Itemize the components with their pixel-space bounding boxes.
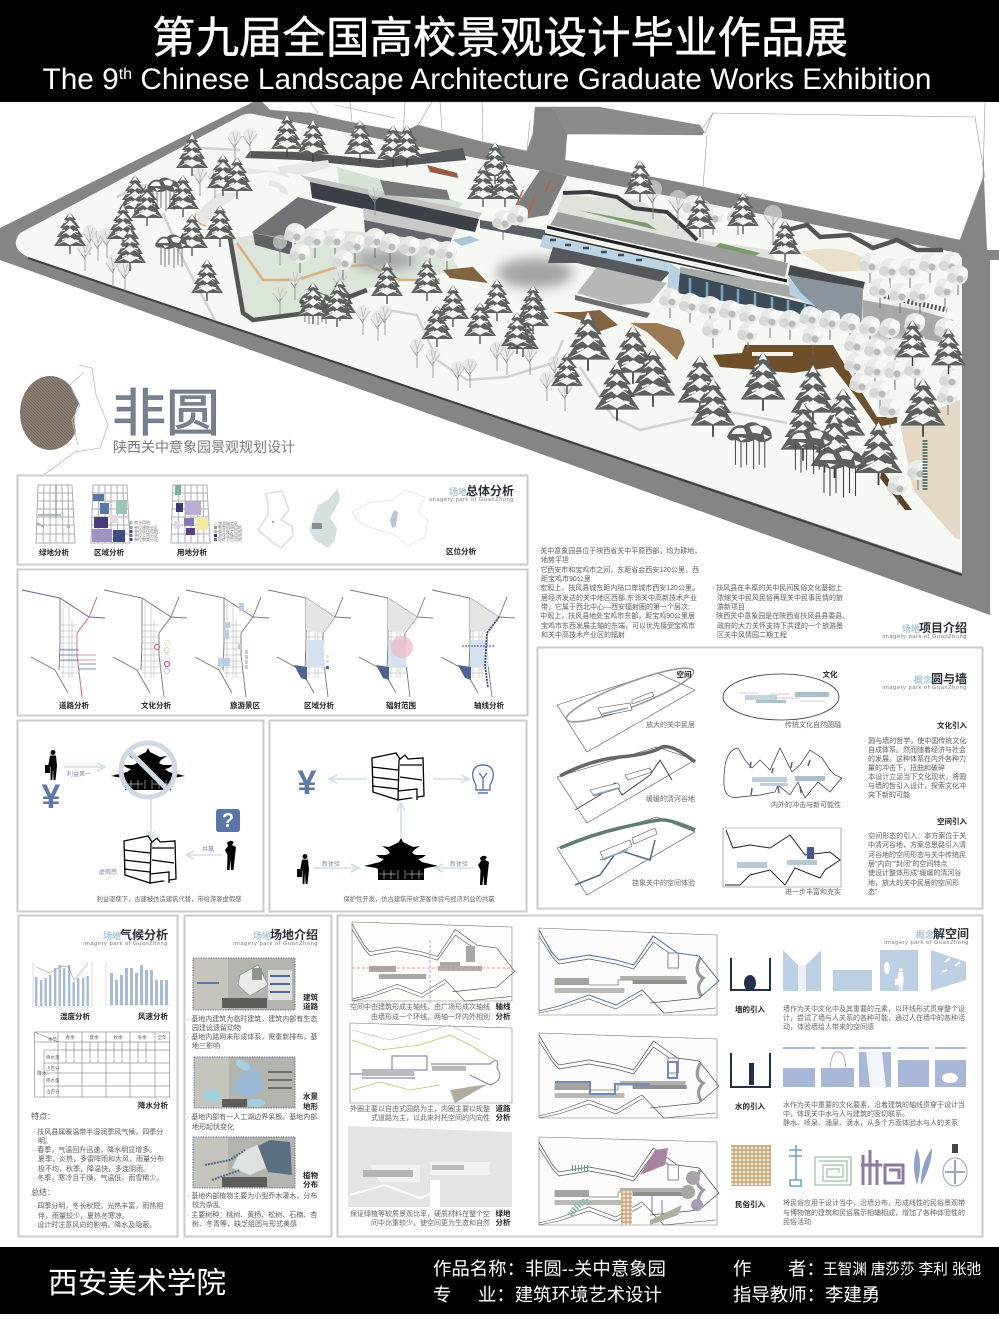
rainfall table: 占百分 xyxy=(46,1065,60,1072)
icon: temple xyxy=(364,838,438,880)
photo labels: 水景 xyxy=(303,1091,318,1101)
purple glyph xyxy=(861,1150,903,1185)
bar chart: humidity xyxy=(33,962,92,1007)
rainfall table: 全年 xyxy=(158,1034,167,1041)
wall panel figures xyxy=(798,958,960,991)
author info: 王智渊 唐莎莎 李利 张弛 xyxy=(823,1260,982,1278)
erhu xyxy=(789,1145,802,1186)
panel: site introduction xyxy=(184,916,332,1236)
panel labels: 区位分析 xyxy=(446,546,476,556)
panel labels: 区域分析 xyxy=(304,700,334,710)
icon: tourist xyxy=(478,856,489,885)
silhouette xyxy=(744,975,756,991)
arrow: new experience right xyxy=(435,860,474,872)
timber terraces xyxy=(443,267,912,510)
location: Shaanxi province xyxy=(309,488,340,548)
text: culture introduction: 突下新的可能 xyxy=(868,790,910,799)
chart labels xyxy=(60,1011,168,1021)
text: water: 地形起伏变化 xyxy=(192,1122,234,1131)
wall experience panels xyxy=(783,950,966,991)
upper garden and wall xyxy=(555,192,943,275)
text: culture introduction: · 本设计立足当下文化现状，将圆 xyxy=(864,772,966,781)
text block: project introduction: 区关中风情园二期工程 xyxy=(717,630,787,639)
captions: left plans: 分析 xyxy=(496,1011,511,1021)
rainfall table: 降水量 xyxy=(46,1077,60,1084)
text: culture introduction xyxy=(864,720,967,799)
panel labels xyxy=(59,700,504,710)
text block: project introduction: 居经济发达的关中地区西部,东邻关中高新技术产业 xyxy=(541,593,697,602)
text: space introduction: 态” xyxy=(868,887,878,896)
icon: question mark xyxy=(216,809,240,832)
maze pattern xyxy=(815,1157,851,1185)
text: space introduction xyxy=(864,816,967,896)
land-use legend: 商业服务用地 xyxy=(218,528,242,534)
water panels xyxy=(783,1047,966,1087)
tourism map xyxy=(186,590,269,697)
diagram: impact xyxy=(724,748,842,798)
location: China map xyxy=(352,490,428,546)
caption: 保护性开发，仿古建筑带给游客体验与经济利益的共赢 xyxy=(343,894,495,903)
icon: modern building xyxy=(124,836,176,883)
courtyards xyxy=(230,167,463,320)
plan: green analysis xyxy=(348,1126,512,1207)
text: features: 特点： xyxy=(31,1111,55,1121)
rainfall table: 季节 xyxy=(48,1036,57,1043)
arrow: down xyxy=(147,799,155,839)
heading xyxy=(884,926,969,946)
snow ground xyxy=(16,114,962,573)
aerial: water and terrain xyxy=(194,1057,295,1108)
text: features: · 扶风县属暖温带半湿润季风气候，四季分 xyxy=(33,1127,163,1136)
section diagram xyxy=(731,958,770,990)
text: water: · 基地内部有一人工湖边界呆板。基地内部 xyxy=(187,1112,317,1121)
text: culture introduction: 与墙的哲引入设计，探索文化冲 xyxy=(868,781,966,790)
text: summary: 总结： xyxy=(31,1187,55,1197)
text: 与博物馆的建筑和民俗展示相辅相成，增加了各种体验性的 xyxy=(783,1208,965,1217)
text: buildings: 园建设遗留动物 xyxy=(192,1023,241,1032)
arrow: win-win xyxy=(186,845,222,859)
leaves xyxy=(914,1148,932,1185)
panel labels: 道路分析 xyxy=(59,700,89,710)
label: 民俗引入 xyxy=(735,1199,765,1209)
panel: overall analysis xyxy=(18,476,528,564)
text: features xyxy=(31,1111,164,1182)
diagram: culture circle xyxy=(723,674,839,720)
text: culture introduction: 的发展。这种体系在内外各种力 xyxy=(868,754,966,763)
work info: 业：建筑环境艺术设计 xyxy=(478,1284,662,1305)
heading xyxy=(882,671,967,691)
title: English: Chinese Landscape Architecture Graduate Works Exhibition xyxy=(132,63,932,96)
diagram labels: 挂象关中的空间体验 xyxy=(632,878,695,887)
text: plants: · 主要树种：桃树、黄杨、松树、石楠、杏 xyxy=(187,1210,317,1219)
text: 民俗活动 xyxy=(783,1217,811,1226)
land-use legend: 医疗卫生用地 xyxy=(218,536,242,542)
diagram labels: 传统文化自然圆融 xyxy=(785,720,841,729)
heading: project introduction xyxy=(882,620,967,640)
text: summary: · 设计时注意风向的影响，降水及隐蔽。 xyxy=(33,1220,156,1229)
site paths xyxy=(117,148,787,430)
label: 水的引入 xyxy=(735,1101,765,1111)
table caption: 降水分析 xyxy=(138,1100,168,1110)
icon: traveler xyxy=(45,750,57,780)
heading: 场地介绍 xyxy=(270,927,318,942)
icon: building xyxy=(372,753,424,800)
text: summary: 伴，雨量较少，夏热冬寒凉。 xyxy=(38,1211,129,1220)
arrow: win-win: 共赢 xyxy=(202,845,214,853)
rainfall table: 秋季 xyxy=(114,1034,123,1041)
zoning legend xyxy=(130,519,158,542)
photo labels: 植物 xyxy=(303,1170,318,1180)
photo labels: 分布 xyxy=(303,1179,318,1189)
chart labels: 风速分析 xyxy=(138,1011,168,1021)
captions: left plans: 分析 xyxy=(496,1112,511,1122)
diagram: enlarged courtyard xyxy=(557,659,698,752)
vase xyxy=(943,1144,967,1186)
logo title: 非圆 xyxy=(112,385,220,442)
title: Chinese: 第九届全国高校景观设计毕业作品展 xyxy=(152,15,848,63)
photo labels: 道路 xyxy=(303,1001,318,1011)
icon: tourist xyxy=(225,841,236,870)
logo: 非圆 xyxy=(20,365,295,474)
heading: 概念 xyxy=(916,929,934,940)
text: 墙作为关中文化中及其重要的元素，以环线形式贯穿整个设 xyxy=(783,1004,965,1013)
heading xyxy=(233,927,318,947)
heading: project introduction: 场地 xyxy=(902,623,920,634)
chart labels: 湿度分析 xyxy=(60,1011,90,1021)
zoning legend: 单位教育分区 xyxy=(134,536,158,542)
radiation map xyxy=(350,590,433,697)
label: 墙的引入 xyxy=(735,1004,765,1014)
road map xyxy=(22,590,105,697)
aerial masterplan xyxy=(0,102,999,615)
culture legend xyxy=(164,640,170,674)
captions: left plans: 分析 xyxy=(496,1217,511,1227)
aerial: buildings and roads xyxy=(193,958,295,1010)
tourism legend xyxy=(245,650,248,669)
face cut xyxy=(72,368,106,447)
captions: left plans: 外圈主要以自由式园路为主，内圈主要以规整 xyxy=(350,1104,490,1113)
section diagram xyxy=(731,1053,770,1087)
captions: left plans: 间中比重较少，使空间更为生态和自然 xyxy=(371,1218,490,1227)
photo labels xyxy=(303,992,318,1189)
diagram labels: 文化 xyxy=(822,669,838,679)
paper-cut pattern xyxy=(731,1145,771,1186)
arrow: to yen xyxy=(329,775,367,783)
captions: left plans: 轴线 xyxy=(496,1001,511,1011)
culture map xyxy=(104,590,187,697)
caption: 利益驱使下，古建被仿造建筑代替，带给游客虚假感 xyxy=(97,894,242,903)
text: plants xyxy=(187,1191,317,1228)
snowy pine trees: large xyxy=(566,312,966,498)
captions: left plans: 式道路为主，以此来衬托空间的内向性 xyxy=(371,1113,490,1122)
text: water xyxy=(187,1112,317,1131)
panel labels: 文化分析 xyxy=(141,700,171,710)
text: plants: 树、冬青等，缺乏组团与形式美感 xyxy=(192,1219,297,1228)
text block: project introduction: 距宝鸡市90公里 xyxy=(541,574,591,583)
rainfall table: 春季 xyxy=(66,1034,75,1041)
author info: 作 xyxy=(733,1258,751,1279)
arrow: new experience right: 新体验 xyxy=(450,860,468,868)
land-use legend: 教育科研用地 xyxy=(218,524,242,530)
text: plants: · 基地内部植物主要为小型乔木灌木，分布 xyxy=(187,1191,317,1200)
text: summary xyxy=(31,1187,163,1229)
text: space introduction: 居“内向”“封闭”的空间特点 xyxy=(868,859,947,868)
icon: question mark: ? xyxy=(222,810,234,832)
work info: 专 xyxy=(433,1284,451,1305)
water details xyxy=(830,1052,958,1087)
text: features: · 春季，气温回升迅速，降水明显增多。 xyxy=(33,1145,156,1154)
captions: left plans: 绿地 xyxy=(496,1208,511,1218)
text: culture introduction: · 圆与墙的哲学，使中国传统文化 xyxy=(864,736,966,745)
text: space introduction: · 空间形态的引入：本方案位于关 xyxy=(864,831,966,840)
land-use legend xyxy=(214,520,242,542)
text block: project introduction: 游新项目 xyxy=(717,602,745,611)
heading xyxy=(429,483,514,503)
header band xyxy=(0,0,999,102)
icon: yen: ¥ xyxy=(42,778,61,816)
text: features: 明。 xyxy=(38,1137,52,1145)
text: summary: · 四季分明，冬长秋短，光热丰富，雨热相 xyxy=(33,1201,163,1210)
rainfall table: 占百分 xyxy=(46,1088,60,1095)
title: English: The 9 xyxy=(42,63,119,96)
text: space introduction: 中清河谷地，方案总思路引入清 xyxy=(868,840,966,849)
zoning legend: 单位居住用地 xyxy=(134,528,158,534)
text xyxy=(783,1100,965,1127)
text: features: 极不均，秋季，降温快，多连阴雨。 xyxy=(38,1164,150,1173)
logo circle xyxy=(20,376,80,450)
heading: 圆与墙 xyxy=(931,671,967,686)
text: 动，体验墙给人带来的空间感 xyxy=(783,1022,874,1031)
logo subtitle: 陕西关中意象园景观规划设计 xyxy=(113,439,295,455)
zoning legend: 单位公园分区 xyxy=(134,532,158,538)
text: 静水、喷泉、涌泉、滴水，从多个方面体验水与人的关系 xyxy=(783,1118,958,1127)
photo labels: 地形 xyxy=(303,1101,318,1111)
text block: project introduction: · 中观上，扶风县地处宝鸡市东部，距宝鸡90公里居 xyxy=(536,611,695,620)
location: county outline xyxy=(258,491,293,548)
face outline xyxy=(45,365,108,474)
rainfall table: 冬季 xyxy=(138,1034,147,1041)
panel: problem diagram xyxy=(18,720,264,912)
diagram: spatial experience xyxy=(557,817,695,895)
row: folk introduction xyxy=(731,1144,967,1226)
panel labels xyxy=(39,546,476,557)
bare trees xyxy=(78,128,782,411)
photo labels: 建筑 xyxy=(303,992,318,1002)
land-use map xyxy=(171,485,210,543)
axis map xyxy=(432,590,515,697)
plan: wall xyxy=(539,928,719,1015)
text block: project introduction: 宝鸡市东西发展主轴的东端，可以优先接受宝鸡市 xyxy=(541,621,695,630)
text block: project introduction: 浓缩关中民风民俗再现关中民事民情的旅 xyxy=(717,593,843,602)
rainfall table xyxy=(34,1032,170,1097)
heading: 解空间 xyxy=(933,926,969,941)
heading: 场地 xyxy=(103,930,121,941)
panel: circle and wall concept xyxy=(538,648,982,908)
zoning legend: 单位建筑分区 xyxy=(134,524,158,530)
work info xyxy=(433,1258,666,1305)
text: 中，体现关中水与人与建筑的密切联系。 xyxy=(783,1109,909,1118)
text: buildings xyxy=(187,1014,317,1050)
footer band xyxy=(0,1247,999,1314)
plan: folk xyxy=(539,1137,719,1225)
diagram labels: 进一步丰富和充实 xyxy=(785,887,841,896)
aerial: vegetation xyxy=(193,1137,295,1188)
heading: imagery park of GuanZhong xyxy=(233,941,318,947)
rainfall table: 夏季 xyxy=(90,1034,99,1041)
heading: 概念 xyxy=(914,674,932,685)
heading: project introduction: 项目介绍 xyxy=(919,620,967,635)
text block: project introduction: · 宏观上，扶风县城东距内陆口岸城市西安120公里。 xyxy=(536,583,699,592)
panel: climate analysis xyxy=(18,916,178,1236)
arrow: to idea xyxy=(433,775,469,783)
text: culture introduction: 文化引入 xyxy=(937,720,967,730)
arrow: new experience left: 新体验 xyxy=(322,860,340,868)
icon: yen: ¥ xyxy=(298,764,317,802)
bar chart: wind speed xyxy=(106,962,170,1005)
text: space introduction: 地，放大的关中民居的空间形 xyxy=(868,878,959,887)
row: water introduction xyxy=(731,1047,966,1127)
author info xyxy=(733,1258,982,1305)
text block: project introduction: 带，它属于西北中心—西安辐射圈的第一个层次; xyxy=(541,602,690,611)
snowy pine trees: small xyxy=(54,115,801,394)
zoning map xyxy=(91,485,130,543)
panel labels: 旅游景区 xyxy=(230,700,260,710)
text block: project introduction xyxy=(536,546,849,639)
plan: axis analysis xyxy=(352,922,515,1005)
text: plants: 较为杂乱 xyxy=(192,1200,220,1209)
panel: road and culture analysis xyxy=(18,570,528,716)
text block: project introduction: 地势平坦 xyxy=(541,555,569,564)
text: features: 夏季，炎热，多雷阵雨和大风，雨量分布 xyxy=(38,1154,164,1163)
heading: imagery park of GuanZhong xyxy=(83,941,168,947)
text: 将民俗应用于设计当中，沿墙分布，形成线性的民俗景观带 xyxy=(783,1198,965,1207)
text block: project introduction: · 扶风县在丰厚的关中民间民俗文化基础上 xyxy=(712,583,842,592)
ground edge shadow xyxy=(28,258,962,575)
silhouette xyxy=(749,1063,754,1085)
work info: 作品名称：非圆--关中意象园 xyxy=(433,1258,666,1279)
land-use legend: 文化设施用地 xyxy=(218,532,242,538)
heading: imagery park of GuanZhong xyxy=(429,497,514,503)
west wing buildings xyxy=(195,148,482,255)
captions: left plans xyxy=(350,1001,511,1227)
title: English: th xyxy=(119,66,132,83)
text: space introduction: 河谷地的空间形态与关中传统民 xyxy=(868,850,966,859)
plan: water xyxy=(539,1033,719,1118)
green-space map xyxy=(36,485,75,543)
icon: light bulb xyxy=(473,765,493,793)
tan paved area xyxy=(900,400,960,540)
rainfall table: 降水 xyxy=(37,1070,47,1077)
diagram labels: 缓缓的清河谷地 xyxy=(646,794,695,803)
land-use legend: 旅游服务区 xyxy=(218,520,238,526)
diagram labels: 放大的关中民居 xyxy=(646,720,695,729)
diagram: valley xyxy=(557,747,695,823)
blossom trees xyxy=(284,195,968,505)
row: wall introduction xyxy=(731,950,966,1031)
zoning map xyxy=(268,590,351,697)
panel labels: 区域分析 xyxy=(94,547,124,557)
icon: traveler xyxy=(297,854,309,884)
label: 虚假感 xyxy=(99,868,117,876)
heading xyxy=(83,927,168,947)
icon: forbidden temple xyxy=(111,743,185,797)
panel labels: 用地分析 xyxy=(177,547,207,557)
heading: imagery park of GuanZhong xyxy=(884,940,969,946)
zoning legend xyxy=(326,655,329,669)
captions: left plans: 道路 xyxy=(496,1103,511,1113)
heading: project introduction: imagery park of GuanZhong xyxy=(882,634,967,640)
captions: left plans: 保证绿植等软质景观比率，硬质材料在整个空 xyxy=(350,1209,490,1218)
author info: 指导教师：李建勇 xyxy=(733,1284,880,1305)
rainfall table: 降水量 xyxy=(46,1054,60,1061)
arrow: profit first: 利益第一 xyxy=(67,770,91,778)
text xyxy=(783,1198,965,1226)
text: 水作为关中重要的文化要素，沿着建筑的轴线贯穿于设计当 xyxy=(783,1100,965,1109)
bridge xyxy=(480,170,567,240)
panel labels: 辐射范围 xyxy=(386,700,416,710)
text: features: · 冬季，寒冷且干燥，气温低，雨雪稀少。 xyxy=(33,1173,163,1182)
text: space introduction: 使设计整体形成“缓缓的清河谷 xyxy=(868,868,961,877)
zoning legend: 商业用地 xyxy=(134,519,150,525)
text: buildings: · 基地内路网未形成体系，需重新排布，基 xyxy=(187,1032,317,1041)
panel: solution diagram xyxy=(270,720,526,912)
arrow: new experience left xyxy=(313,860,359,872)
text block: project introduction: 和关中高技术产业区的辐射 xyxy=(541,630,625,639)
heading: 气候分析 xyxy=(120,927,168,942)
text xyxy=(783,1004,965,1031)
text block: project introduction: 政府的大力关怀支持下共建的一个旅游景 xyxy=(717,621,843,630)
school name: 西安美术学院 xyxy=(48,1267,226,1300)
text: space introduction: 空间引入 xyxy=(937,816,967,826)
text block: project introduction: · 陕西关中意象园是在陕西省扶风县县委县、 xyxy=(712,611,849,620)
text: culture introduction: 自成体系。然而随着经济与社会 xyxy=(868,745,966,754)
surrounding buildings xyxy=(262,102,985,240)
blurred plazas xyxy=(353,250,935,340)
text block: project introduction: · 关中意象园县位于陕西省关中平原西部，均为耕地， xyxy=(536,546,701,555)
road legend xyxy=(79,655,96,669)
captions: left plans: 空间中由建筑形成主轴线，由广场形成次轴线 xyxy=(350,1002,490,1011)
text: buildings: 地三影响 xyxy=(192,1041,220,1050)
main long building xyxy=(540,212,953,345)
text: culture introduction: 量的冲击下，扭曲和破碎 xyxy=(868,763,945,772)
heading: imagery park of GuanZhong xyxy=(882,685,967,691)
arrow: up xyxy=(397,803,405,838)
heading: 场地 xyxy=(449,486,467,497)
text: 计，尝试了墙与人关系的各种可能，通过人在墙中的各种活 xyxy=(783,1013,965,1022)
diagram labels: 空间 xyxy=(676,669,692,679)
panel labels: 轴线分析 xyxy=(474,700,504,710)
heading: 总体分析 xyxy=(466,483,514,498)
arrow: profit first xyxy=(64,763,105,778)
panel: deconstructing space xyxy=(338,916,982,1236)
plan: road analysis xyxy=(350,1023,512,1103)
diagram: enriched xyxy=(723,828,841,887)
author info: 者： xyxy=(788,1258,825,1279)
diagram labels: 内外的冲击与新可能性 xyxy=(771,800,841,809)
diagram labels xyxy=(632,669,841,896)
text: buildings: · 基地内建筑为临时建筑，建筑内部有生态 xyxy=(187,1014,317,1023)
captions: left plans: 由墙形成一个环线，两轴一环内外相别 xyxy=(371,1012,490,1021)
heading: 场地 xyxy=(253,930,271,941)
road network xyxy=(0,102,999,615)
panel labels: 绿地分析 xyxy=(39,547,69,557)
text block: project introduction: · 它西安市和宝鸡市之间，东距省会西安120公里，西 xyxy=(536,565,699,574)
